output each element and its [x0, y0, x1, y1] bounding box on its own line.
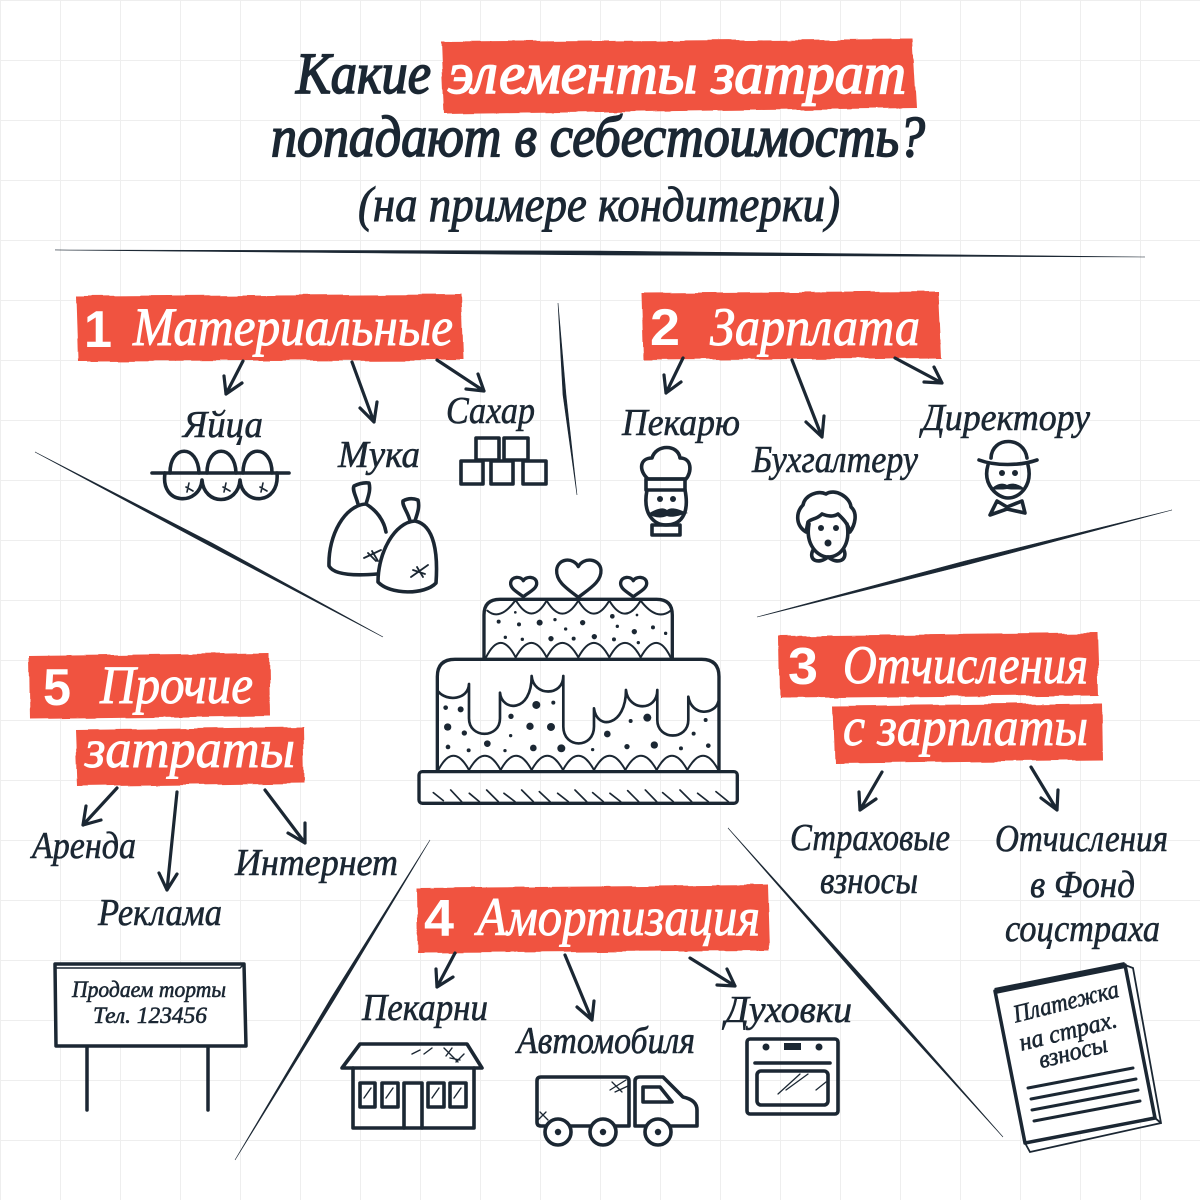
label: advertising: Реклама	[97, 892, 222, 934]
heading: 2 salary: Зарплата	[710, 297, 920, 357]
heading: 4 depreciation: Амортизация	[474, 887, 760, 947]
label: accountant: Бухгалтеру	[751, 439, 918, 481]
heading: 3 contributions: с зарплаты	[843, 697, 1088, 757]
panel: 2 salary	[621, 291, 1090, 561]
arrows: other costs	[83, 788, 305, 890]
bottom tier	[437, 659, 719, 771]
label: social insurance fund: соцстраха	[1005, 908, 1160, 950]
heading: 5 other costs: 5	[43, 659, 71, 717]
icon: billboard: Тел. 123456	[93, 1003, 208, 1028]
icon: payment document: Платежка	[1010, 976, 1122, 1029]
icon: truck	[537, 1077, 697, 1145]
title: попадают в себестоимость?	[271, 104, 925, 169]
icon: payment document: взносы	[1036, 1031, 1110, 1074]
panel: 1 materials	[76, 294, 546, 592]
label: internet: Интернет	[234, 842, 398, 884]
label: baker: Пекарю	[621, 402, 740, 444]
arrows: depreciation	[436, 953, 735, 1020]
label: sugar: Сахар	[446, 390, 535, 432]
heading: 3 contributions: Отчисления	[843, 635, 1088, 695]
arrows: salary	[664, 358, 942, 437]
icon: billboard	[55, 964, 246, 1110]
label: flour: Мука	[337, 434, 420, 476]
hearts	[511, 560, 647, 597]
label: bakeries: Пекарни	[361, 987, 488, 1029]
icon: accountant	[798, 492, 855, 561]
label: director: Директору	[919, 397, 1090, 439]
label: rent: Аренда	[29, 825, 136, 867]
heading: 5 other costs: Прочие	[99, 655, 253, 715]
title: (на примере кондитерки)	[358, 176, 840, 232]
heading: 5 other costs: затраты	[84, 719, 295, 779]
icon: payment document	[995, 965, 1161, 1152]
title: Какие	[295, 41, 431, 106]
label: ovens: Духовки	[722, 989, 852, 1031]
heading: 1 materials: Материальные	[132, 297, 453, 357]
icon: oven	[747, 1039, 838, 1114]
label: insurance contributions: взносы	[820, 860, 918, 902]
heading: 5 other costs	[29, 653, 304, 786]
arrows: materials	[224, 360, 484, 422]
icon: director	[979, 442, 1037, 515]
arrows: contributions	[859, 767, 1058, 810]
title	[271, 39, 925, 232]
illustration: cake	[419, 560, 737, 803]
heading: 3 contributions: 3	[788, 638, 818, 696]
icon: chef	[642, 448, 690, 535]
title: элементы затрат	[448, 41, 906, 106]
label: social insurance fund: Отчисления	[995, 818, 1168, 860]
top tier	[484, 599, 672, 658]
heading: 2 salary	[642, 291, 941, 360]
heading: 1 materials: 1	[84, 301, 112, 359]
label: social insurance fund: в Фонд	[1030, 864, 1135, 906]
label: vehicle: Автомобиля	[514, 1020, 695, 1062]
label: social insurance fund	[995, 818, 1168, 950]
icon: billboard: Продаем торты	[71, 977, 226, 1002]
label: insurance contributions	[790, 817, 950, 902]
cake stand	[419, 772, 737, 803]
icon: flour bags	[329, 483, 437, 592]
heading: 4 depreciation: 4	[424, 890, 454, 948]
icon: payment document: на страх.	[1016, 1006, 1120, 1057]
panel: 4 depreciation	[342, 885, 852, 1145]
heading: 3 contributions	[779, 633, 1103, 763]
icon: bakery building	[342, 1044, 482, 1128]
label: insurance contributions: Страховые	[790, 817, 950, 859]
panel: 3 payroll contributions	[779, 633, 1168, 1152]
heading: 2 salary: 2	[650, 299, 680, 357]
sprinkles	[443, 611, 711, 752]
panel: 5 other costs	[29, 653, 398, 1110]
label: eggs: Яйца	[181, 404, 263, 446]
icon: sugar cubes	[461, 438, 546, 484]
icon: eggs	[152, 451, 289, 500]
heading: 4 depreciation	[417, 885, 770, 953]
